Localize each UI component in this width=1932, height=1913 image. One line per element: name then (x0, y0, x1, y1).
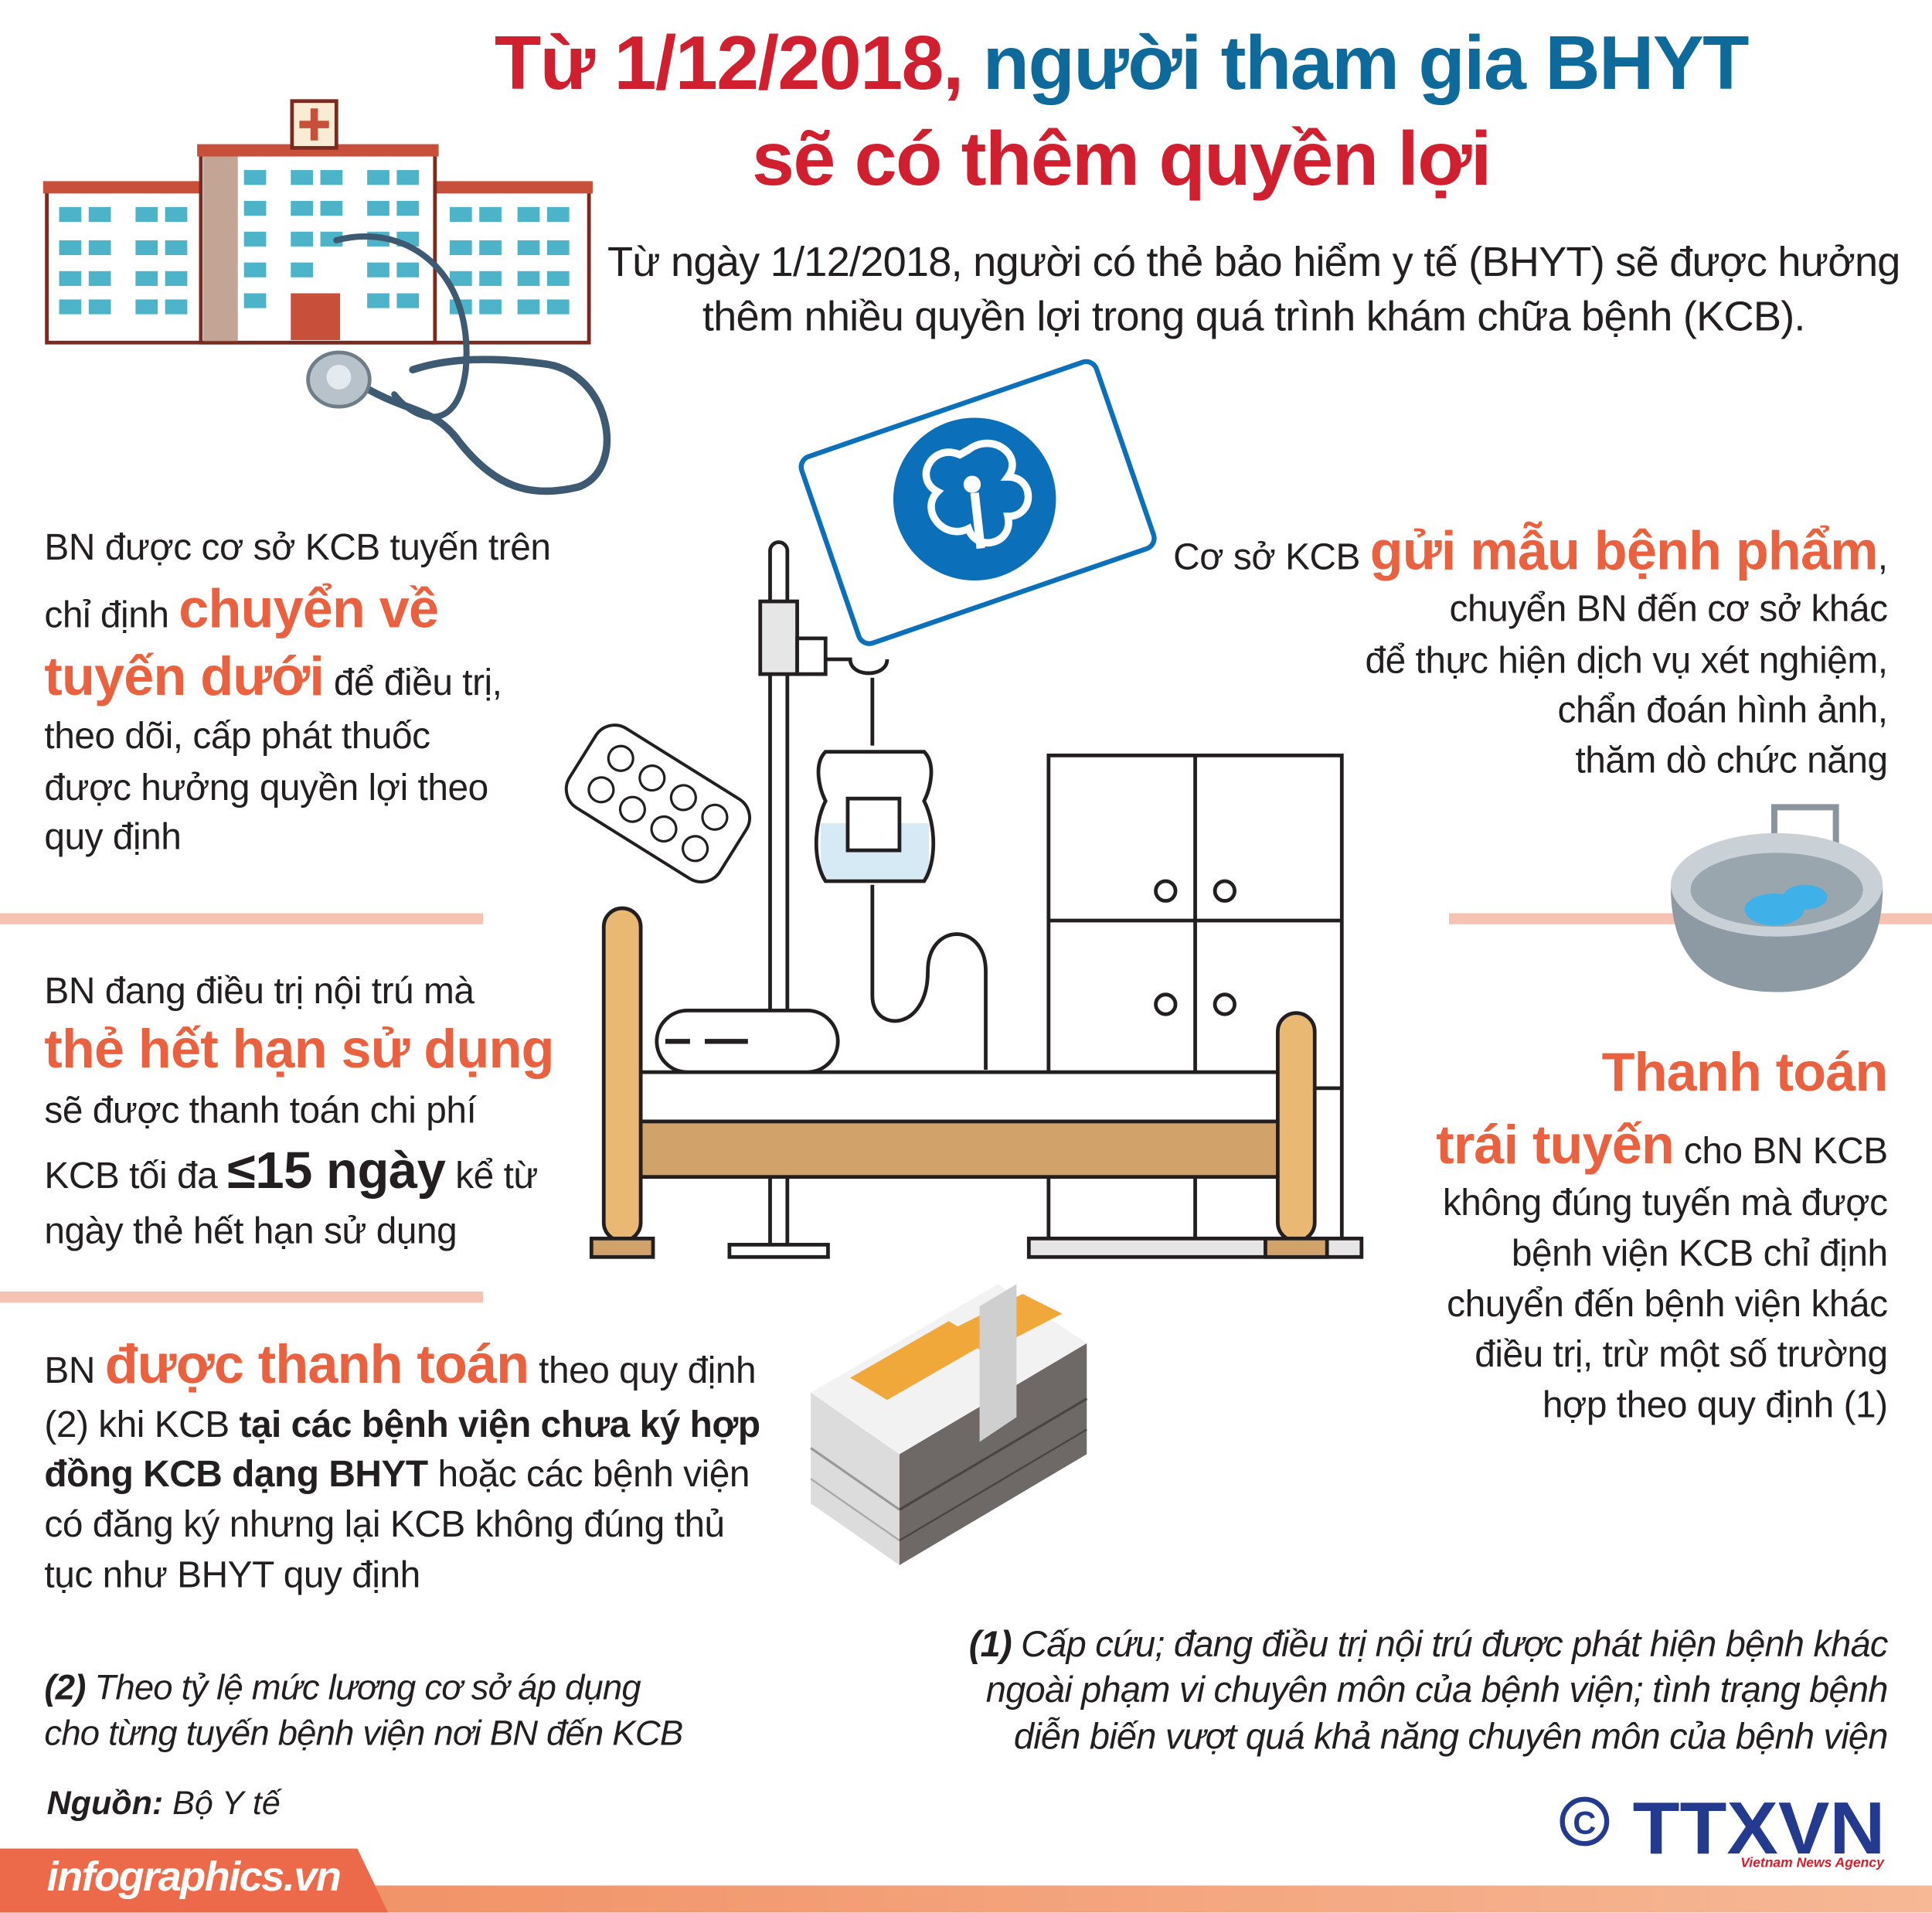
icon: sample dish (1671, 807, 1883, 992)
left block 1: quy định (44, 817, 181, 858)
source: Nguồn: Bộ Y tế (47, 1785, 281, 1822)
intro text (607, 239, 1900, 340)
left block 2: sẽ được thanh toán chi phí (44, 1091, 476, 1132)
website: infographics.vn (47, 1853, 340, 1901)
right block 1: Cơ sở KCB gửi mẫu bệnh phẩm, (1173, 521, 1888, 582)
left block 3: BN được thanh toán theo quy định (44, 1335, 756, 1395)
footnote 1: ngoài phạm vi chuyên môn của bệnh viện; tình trạng bệnh (986, 1670, 1888, 1710)
footnote 1: diễn biến vượt quá khả năng chuyên môn của bệnh viện (1014, 1717, 1888, 1758)
intro text: thêm nhiều quyền lợi trong quá trình khám chữa bệnh (KCB). (702, 293, 1805, 340)
logo: TTXVN: TTXVN (1633, 1787, 1885, 1870)
icon: pills (558, 717, 758, 890)
right block 1: để thực hiện dịch vụ xét nghiệm, (1365, 641, 1888, 682)
right block 2: điều trị, trừ một số trường (1475, 1335, 1888, 1375)
right block 1: chẩn đoán hình ảnh, (1558, 690, 1888, 730)
bottom bar (0, 1849, 1932, 1913)
icon: insurance card (798, 359, 1157, 647)
right block 2: trái tuyến cho BN KCB (1436, 1115, 1888, 1176)
left block 2: ngày thẻ hết hạn sử dụng (44, 1211, 457, 1252)
left block 1: được hưởng quyền lợi theo (44, 768, 488, 808)
title: Từ 1/12/2018, người tham gia BHYT (495, 21, 1748, 106)
left block 1: BN được cơ sở KCB tuyến trên (44, 527, 550, 568)
title (495, 21, 1748, 202)
left block 2: thẻ hết hạn sử dụng (44, 1019, 554, 1080)
icon: hospital (43, 101, 593, 342)
left block 3: có đăng ký nhưng lại KCB không đúng thủ (44, 1505, 725, 1545)
icon: stethoscope (308, 237, 607, 492)
footnote 2: cho từng tuyến bệnh viện nơi BN đến KCB (44, 1714, 682, 1754)
right block 2: không đúng tuyến mà được (1443, 1183, 1888, 1224)
right block 2: hợp theo quy định (1) (1543, 1385, 1888, 1426)
right block 1: chuyển BN đến cơ sở khác (1450, 589, 1888, 630)
icon: IV pole and bag (760, 543, 986, 1251)
right block 2: bệnh viện KCB chỉ định (1512, 1234, 1888, 1275)
intro text: Từ ngày 1/12/2018, người có thẻ bảo hiểm y tế (BHYT) sẽ được hưởng (607, 239, 1900, 286)
left block 1: tuyến dưới để điều trị, (44, 647, 502, 707)
right block 1: thăm dò chức năng (1575, 740, 1888, 781)
icon: bed (591, 908, 1362, 1257)
left block 3: (2) khi KCB tại các bệnh viện chưa ký hợp (44, 1405, 760, 1445)
footnote 1: (1) Cấp cứu; đang điều trị nội trú được phát hiện bệnh khác (969, 1624, 1888, 1665)
left block 2: KCB tối đa ≤15 ngày kể từ (44, 1141, 538, 1199)
icon: money stack (811, 1284, 1087, 1565)
left block 1: theo dõi, cấp phát thuốc (44, 716, 430, 757)
left block 3: tục như BHYT quy định (44, 1555, 420, 1596)
icon: cabinet (1049, 755, 1342, 1238)
footnote 2: (2) Theo tỷ lệ mức lương cơ sở áp dụng (44, 1669, 641, 1708)
title: sẽ có thêm quyền lợi (752, 117, 1491, 202)
left block 2: BN đang điều trị nội trú mà (44, 971, 474, 1012)
right block 2: chuyển đến bệnh viện khác (1447, 1284, 1888, 1325)
left block 1: chỉ định chuyển về (44, 579, 438, 639)
logo: TTXVN: C (1573, 1804, 1596, 1840)
right block 2: Thanh toán (1602, 1043, 1888, 1103)
logo: TTXVN: Vietnam News Agency (1740, 1855, 1885, 1870)
left block 3: đồng KCB dạng BHYT hoặc các bệnh viện (44, 1454, 750, 1495)
